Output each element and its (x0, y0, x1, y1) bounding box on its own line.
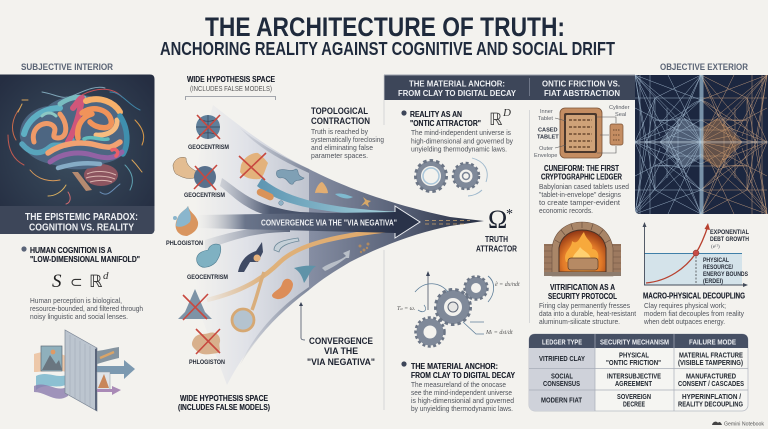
table header (542, 340, 736, 346)
text block: human cognition (21, 246, 143, 321)
table row: modern fiat: MODERN FIAT (541, 398, 583, 404)
icon: perception filter illustration (34, 330, 135, 411)
text block: reality as ontic attractor (401, 107, 513, 154)
callout: convergence via negativa (299, 302, 375, 368)
table row: social consensus: AGREEMENT (615, 381, 653, 388)
header band: material anchor and ontic friction: ONTIC FRICTION VS. (542, 78, 620, 88)
icon: kiln (544, 222, 621, 276)
heading: objective exterior: OBJECTIVE EXTERIOR (660, 62, 748, 73)
table row: modern fiat (541, 394, 743, 408)
text block: human cognition: HUMAN COGNITION IS A (30, 246, 112, 255)
text block: topological contraction: Truth is reached by (311, 127, 368, 136)
table row: social consensus: SOCIAL (551, 374, 574, 380)
icon: cased cuneiform tablet: CASED (538, 128, 558, 134)
icon: cased cuneiform tablet: Seal (615, 112, 626, 118)
text block: cuneiform: CRYPTOGRAPHIC LEDGER (541, 172, 622, 182)
text block: vitrification: aluminum-silicate structure. (539, 317, 620, 326)
label: phlogiston 2: PHLOGISTON (189, 359, 225, 366)
text block: human cognition: ℝ (89, 272, 103, 292)
label: wide hypothesis space top: WIDE HYPOTHESIS SPACE (187, 75, 276, 84)
chart: debt vs energy: (e (711, 244, 715, 250)
icon: cased cuneiform tablet (534, 105, 630, 159)
table: ledger comparison (529, 334, 748, 411)
icon: gears lower with formulas: Ta = ω. (397, 306, 415, 312)
text block: human cognition: resource-bounded, and filtered through (30, 304, 143, 313)
text block: reality as ontic attractor: ℝ (489, 110, 503, 130)
text block: reality as ontic attractor: D (502, 107, 511, 119)
header band: material anchor and ontic friction (384, 74, 635, 100)
icon: cased cuneiform tablet: Cylinder (609, 105, 630, 111)
chart: debt vs energy: ) (718, 243, 720, 250)
text block: reality as ontic attractor: The mind-independent universe is (411, 128, 511, 137)
icon: brain cerebellum and stem (72, 164, 118, 191)
label: wide hypothesis space top (186, 75, 276, 100)
text block: reality as ontic attractor: high-dimensional and governed by (411, 136, 513, 146)
table row: vitrified clay: PHYSICAL (619, 352, 650, 360)
chart: debt vs energy: rt (715, 242, 719, 248)
text block: cuneiform: economic records. (539, 206, 593, 215)
text block: macro-physical decoupling: modern fiat decouples from reality (644, 309, 744, 318)
text block: material anchor lower: THE MATERIAL ANCHOR: (411, 362, 498, 371)
header band: material anchor and ontic friction: THE MATERIAL ANCHOR: (409, 78, 505, 88)
symbol: truth attractor: * (506, 207, 513, 222)
icon: rejected cone (178, 289, 212, 320)
table row: modern fiat: DECREE (623, 402, 645, 408)
text block: cuneiform: to create tamper-evident (539, 198, 620, 207)
icon: cased cuneiform tablet: TABLET (537, 134, 559, 140)
table row: vitrified clay: VITRIFIED CLAY (539, 356, 585, 363)
icon: cased cuneiform tablet: Envelope (534, 153, 557, 159)
label: phlogiston 1: PHLOGISTON (166, 240, 203, 247)
chart: convergence funnel (195, 105, 484, 385)
callout: convergence via negativa: "VIA NEGATIVA" (307, 357, 375, 368)
table row: social consensus (543, 374, 744, 388)
chart: debt vs energy: ENERGY BOUNDS (703, 271, 748, 278)
label: wide hypothesis space top: (INCLUDES FALSE MODELS) (190, 84, 272, 93)
text block: macro-physical decoupling: when debt outpaces energy. (643, 317, 725, 326)
icon: gears lower with formulas: Mi = dsi/dt (485, 330, 513, 336)
symbol: truth attractor: Ω (488, 205, 507, 234)
table row: social consensus: MANUFACTURED (686, 374, 736, 380)
icon: rejected tan blob (192, 329, 220, 354)
heading: subjective interior: SUBJECTIVE INTERIOR (21, 62, 113, 73)
title (160, 12, 615, 59)
icon: gears lower with formulas (397, 271, 520, 346)
shapes: rejected hypotheses in funnel (238, 169, 371, 299)
icon: rejected globe 2 (194, 165, 217, 190)
central arrow (198, 206, 470, 238)
header band: material anchor and ontic friction: FIAT ABSTRACTION (544, 88, 620, 98)
label: wide hypothesis space bottom (178, 394, 270, 412)
icon: gears upper (416, 158, 487, 196)
banner: epistemic paradox: COGNITION VS. REALITY (29, 222, 134, 234)
icon: rejected globe 1 (196, 115, 220, 139)
callout: convergence via negativa: VIA THE (324, 346, 359, 357)
text block: macro-physical decoupling: MACRO-PHYSICAL DECOUPLING (643, 292, 745, 300)
icon: neural wires (8, 87, 144, 204)
formula: S subset R d: S (52, 271, 62, 292)
text block: vitrification: Firing clay permanently fresses (539, 301, 630, 310)
text block: macro-physical decoupling: Clay requires physical work; (644, 301, 726, 310)
label: geocentrism 2: GEOCENTRISM (184, 192, 225, 199)
chart: debt vs energy: PHYSICAL (703, 257, 729, 264)
text block: cuneiform: "tablet-in-envelope" designs (539, 190, 621, 199)
header band: material anchor and ontic friction: FROM CLAY TO DIGITAL DECAY (398, 88, 516, 98)
text block: vitrification: data into a durable, heat-resistant (539, 309, 636, 318)
text block: human cognition: ⊂ (70, 273, 83, 291)
text block: material anchor lower: see the mind-independent universe (411, 388, 512, 397)
table row: vitrified clay: "ONTIC FRICTION" (606, 360, 661, 367)
icon: beige blob (173, 157, 196, 179)
text block: topological contraction (311, 105, 384, 160)
callout: convergence via negativa: CONVERGENCE (309, 336, 374, 347)
text block: topological contraction: systematically foreclosing (311, 135, 384, 144)
label: geocentrism 3: GEOCENTRISM (187, 274, 228, 281)
text block: material anchor lower (401, 361, 516, 413)
symbol: truth attractor: TRUTH (485, 234, 508, 244)
label: wide hypothesis space bottom: WIDE HYPOTHESIS SPACE (180, 394, 269, 403)
table row: social consensus: CONSENT / CASCADES (678, 381, 744, 388)
icon: cased cuneiform tablet: Inner (540, 109, 553, 115)
text block: human cognition: Human perception is biological, (30, 296, 122, 305)
text block: topological contraction: parameter spaces. (311, 151, 368, 160)
stream: lower grey (205, 226, 290, 250)
table row: social consensus: CONSENSUS (543, 381, 580, 388)
chart: debt vs energy: (ERDEI) (703, 278, 723, 285)
text block: material anchor lower: The measureland of the onocase (411, 380, 506, 389)
panel: brain image (0, 74, 154, 234)
banner: epistemic paradox: THE EPISTEMIC PARADOX: (25, 212, 138, 223)
watermark: gemini notebook: Gemini Notebook (724, 422, 764, 428)
text block: cuneiform: Babylonian cased tablets used (539, 182, 629, 191)
text block: topological contraction: and eliminating false (311, 143, 373, 152)
stream: light blue (257, 178, 400, 216)
text block: material anchor lower: FROM CLAY TO DIGITAL DECAY (411, 371, 516, 380)
icon: cased cuneiform tablet: Tablet (538, 116, 553, 122)
text block: vitrification: VITRIFICATION AS A (550, 283, 615, 292)
symbol: truth attractor (476, 205, 517, 254)
chart: debt vs energy: DEBT GROWTH (710, 236, 749, 243)
panel: objective lattice image (635, 75, 768, 214)
title: THE ARCHITECTURE OF TRUTH: (205, 12, 565, 42)
text block: material anchor lower: by unyielding thermodynamic laws. (411, 404, 513, 413)
chart: debt vs energy: RESOURCE/ (703, 264, 733, 271)
text block: reality as ontic attractor: REALITY AS AN (410, 110, 462, 119)
icon: blue blob (197, 244, 221, 267)
table row: modern fiat: HYPERINFLATION / (682, 394, 741, 401)
text block: human cognition: noisy linguistic and social lenses. (30, 312, 128, 321)
icon: gears lower with formulas: ẽ = dx/ndt (495, 282, 520, 288)
table row: modern fiat: SOVEREIGN (617, 394, 651, 401)
stream: orange with loop (207, 228, 405, 331)
text block: vitrification: SECURITY PROTOCOL (548, 292, 617, 301)
text block: topological contraction: CONTRACTION (311, 115, 370, 126)
table row: vitrified clay: (VISIBLE TAMPERING) (678, 360, 743, 367)
text block: topological contraction: TOPOLOGICAL (311, 105, 368, 116)
table header: FAILURE MODE (689, 340, 736, 346)
title: ANCHORING REALITY AGAINST COGNITIVE AND SOCIAL DRIFT (160, 39, 615, 59)
chart: debt vs energy (642, 222, 749, 287)
table header: LEDGER TYPE (542, 340, 582, 346)
table row: vitrified clay (539, 352, 743, 367)
text block: reality as ontic attractor: "ONTIC ATTRACTOR" (410, 119, 481, 128)
chart: debt vs energy: EXPONENTIAL (710, 229, 749, 236)
label: wide hypothesis space bottom: (INCLUDES FALSE MODELS) (178, 403, 270, 412)
text block: vitrification (539, 283, 636, 326)
text block: human cognition: "LOW-DIMENSIONAL MANIFOLD" (30, 255, 140, 264)
table row: modern fiat: REALITY DECOUPLING (678, 402, 743, 408)
icon: rejected beige shape (239, 153, 268, 180)
text block: material anchor lower: is high-dimensionial and governed (411, 396, 514, 405)
stream: upper navy (220, 178, 400, 222)
icon: cased cuneiform tablet: Outer (539, 146, 553, 152)
symbol: truth attractor: ATTRACTOR (476, 244, 517, 254)
text block: cuneiform: CUNEIFORM: THE FIRST (544, 164, 619, 173)
text block: reality as ontic attractor: unyielding thermodynamic laws. (411, 144, 507, 154)
central arrow: CONVERGENCE VIA THE "VIA NEGATIVA" (261, 218, 397, 228)
text block: macro-physical decoupling (643, 292, 745, 326)
label: geocentrism 1: GEOCENTRISM (188, 144, 229, 151)
table row: vitrified clay: MATERIAL FRACTURE (679, 352, 743, 360)
icon: brain cortex (20, 95, 128, 169)
text block: cuneiform (539, 164, 629, 215)
text block: human cognition: d (103, 270, 109, 282)
table row: social consensus: INTERSUBJECTIVE (607, 374, 661, 380)
table header: SECURITY MECHANISM (600, 340, 669, 346)
icon: phlogiston flame (173, 206, 198, 236)
banner: epistemic paradox (0, 206, 154, 234)
